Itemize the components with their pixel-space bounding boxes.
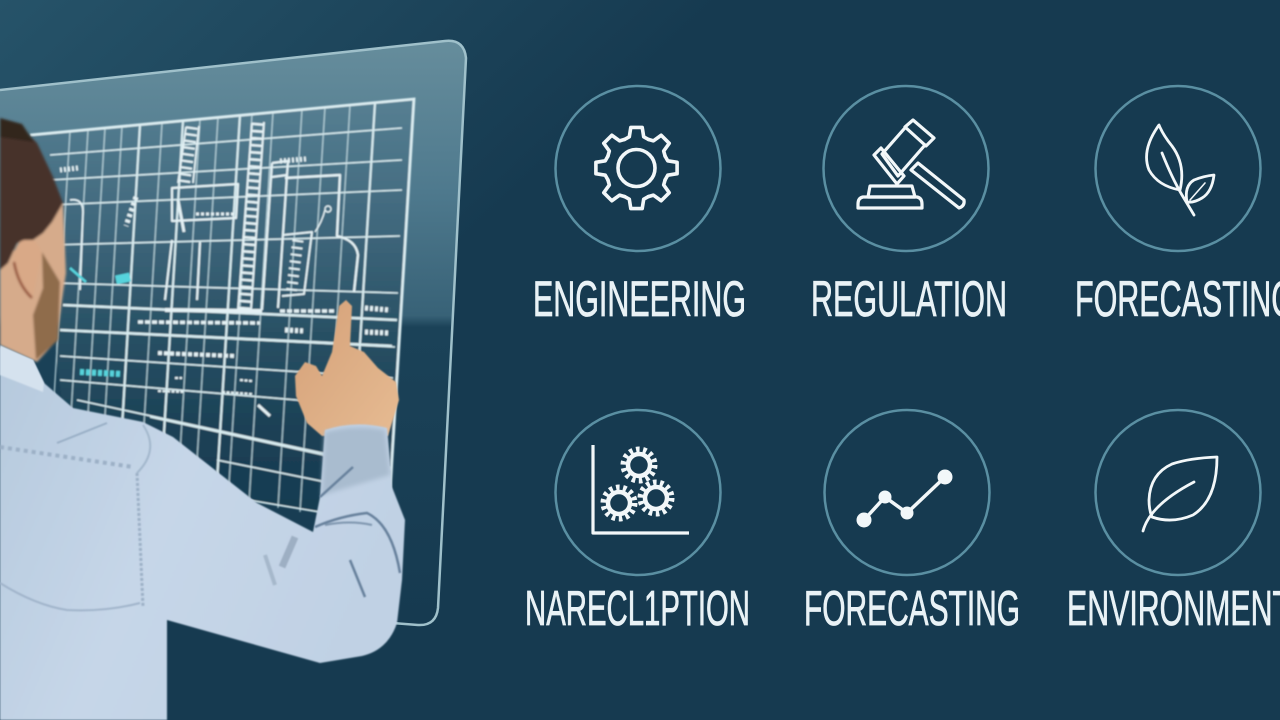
label: nareclption: NARECL1PTION [525, 582, 750, 636]
icon: leaf [1143, 457, 1217, 531]
panel: glass touchscreen [0, 41, 466, 625]
icon tile: regulation [824, 86, 988, 251]
blueprint grid [30, 99, 414, 525]
icon: two-leaf sprout [1147, 125, 1214, 215]
icon: gear [596, 127, 677, 209]
icon tile: environment [1096, 410, 1260, 575]
label: engineering: ENGINEERING [533, 271, 746, 327]
blueprint drawing: ladders and rooms [60, 122, 390, 416]
label: regulation: REGULATION [811, 271, 1007, 327]
icon: gavel [858, 120, 964, 208]
icon tile: engineering [556, 86, 720, 251]
shirt [0, 347, 405, 720]
cuff and forearm shading [322, 427, 390, 495]
label: forecasting bottom: FORECASTING [804, 582, 1020, 636]
head and neck [0, 118, 66, 362]
icon: line chart [856, 470, 952, 528]
icon tile: chart with gears [556, 410, 720, 575]
icon tile: trend line [824, 410, 990, 575]
collar [0, 345, 44, 392]
shirt folds and seams [0, 423, 400, 610]
icon: gears on axes [593, 445, 689, 533]
hand pointing [295, 300, 399, 436]
icon tile: forecasting plant [1096, 86, 1260, 251]
blueprint frame [30, 99, 414, 525]
person: engineer from behind [0, 118, 405, 720]
